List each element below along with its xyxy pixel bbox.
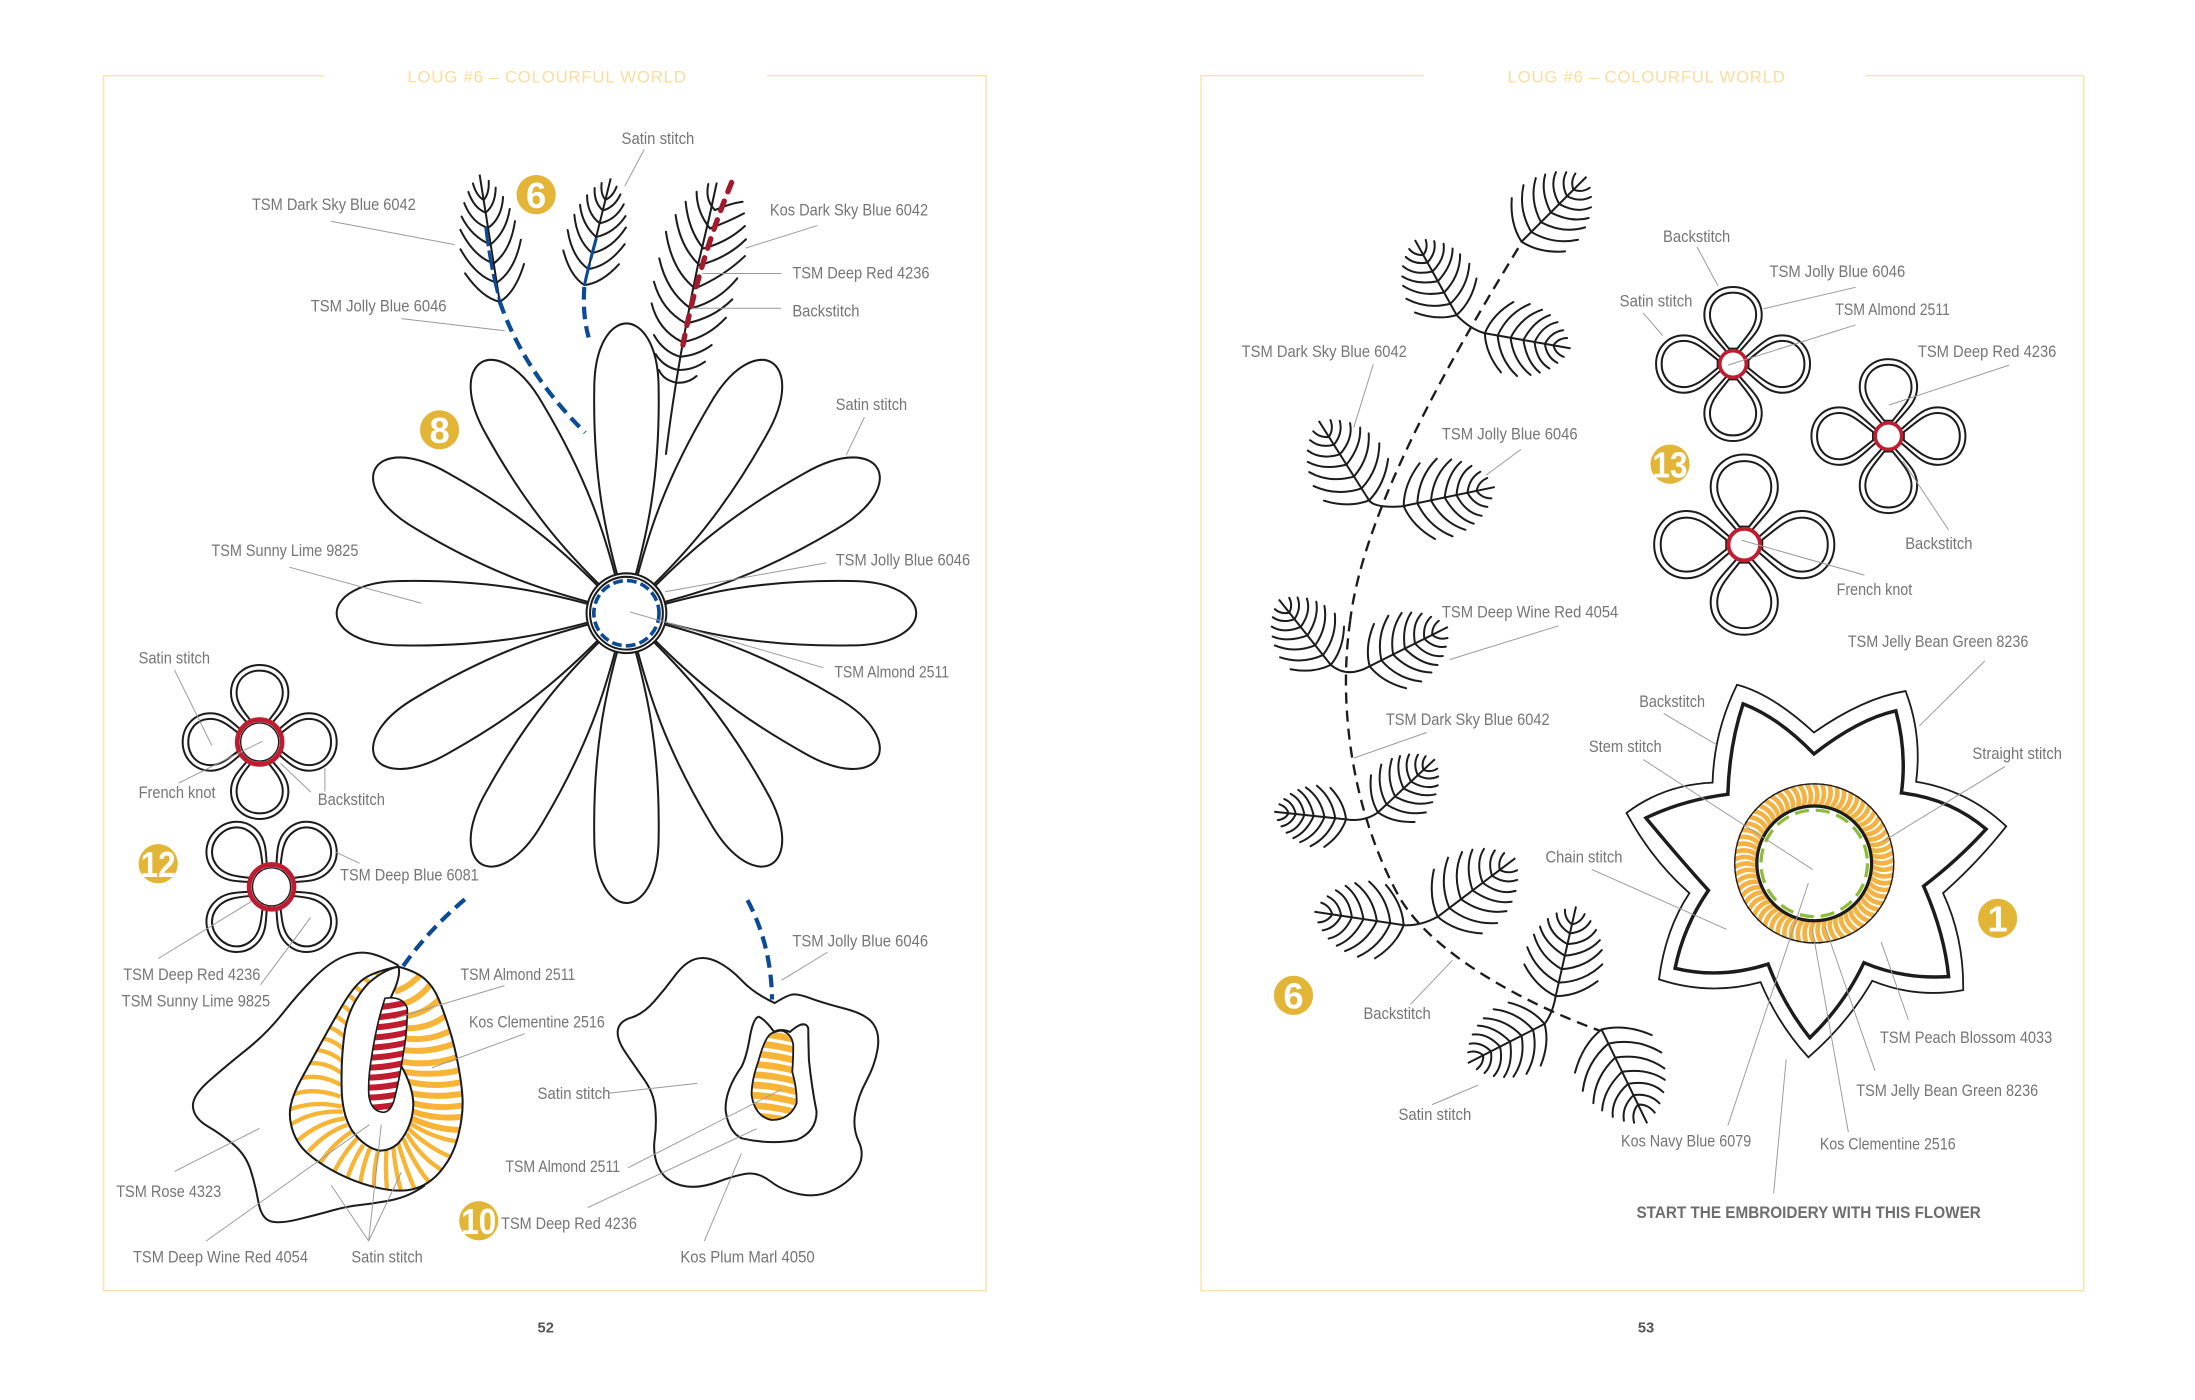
badge 12: 12 [141, 844, 176, 885]
blue stem left [500, 302, 585, 433]
left flower outer petal [193, 953, 425, 1222]
left flower red tube [367, 998, 410, 1112]
label: Backstitch [318, 791, 385, 809]
leaf pair F [1451, 898, 1614, 1095]
blue stem on right flower [748, 900, 772, 1000]
badge 6 [517, 175, 556, 216]
flower C [1654, 455, 1834, 635]
panel: left page [104, 68, 986, 1337]
label: TSM Jolly Blue 6046 [836, 552, 970, 570]
right flower inner tulip and gold stripes [726, 1017, 817, 1142]
callout: start flower: START THE EMBROIDERY WITH THIS FLOWER [1636, 1204, 1981, 1222]
blue stitch on left leaf [486, 227, 500, 301]
leaf pair A [1383, 223, 1577, 384]
label: TSM Dark Sky Blue 6042 [1386, 711, 1550, 729]
label: TSM Peach Blossom 4033 [1880, 1029, 2052, 1047]
leaf middle [556, 171, 639, 292]
flower left lower [159, 775, 384, 999]
label: TSM Deep Red 4236 [123, 966, 260, 984]
label: TSM Jolly Blue 6046 [1769, 263, 1905, 281]
label: Backstitch [1663, 228, 1730, 246]
label: TSM Almond 2511 [461, 966, 575, 984]
badge 8: 8 [429, 410, 450, 451]
dashed stem upper [1350, 248, 1518, 620]
label: Chain stitch [1545, 848, 1622, 866]
branch lower [1252, 578, 2006, 1143]
page frame right [1201, 76, 2084, 1291]
label: TSM Dark Sky Blue 6042 [1242, 343, 1407, 361]
label: Kos Clementine 2516 [469, 1014, 605, 1032]
leaf pair E [1309, 825, 1540, 963]
label: TSM Almond 2511 [834, 664, 949, 682]
label: Satin stitch [538, 1085, 610, 1103]
dashed stem lower [1346, 620, 1600, 1031]
daisy flower [337, 323, 916, 903]
label: Backstitch [1363, 1005, 1431, 1023]
blue stem on left flower [403, 896, 469, 966]
label: TSM Almond 2511 [1835, 301, 1950, 319]
label: Kos Navy Blue 6079 [1621, 1133, 1751, 1151]
page frame left [104, 76, 986, 1291]
left flower gold band [288, 967, 465, 1193]
blue stitch on middle leaf [584, 238, 596, 286]
badge 8 [420, 410, 459, 451]
badge 13: 13 [1653, 444, 1688, 485]
long-stem leaf [652, 178, 746, 454]
star inner [1646, 704, 1986, 1038]
label: Backstitch [1639, 693, 1705, 711]
red stitch on long leaf [683, 178, 733, 345]
branch upper [1286, 248, 1518, 620]
heading left: LOUG #6 – COLOURFUL WORLD [407, 68, 686, 87]
flower B [1811, 359, 1965, 513]
left flower inner white [342, 967, 413, 1151]
page number 53: 53 [1638, 1321, 1654, 1337]
heading right: LOUG #6 – COLOURFUL WORLD [1508, 68, 1785, 87]
label: TSM Deep Red 4236 [1918, 343, 2056, 361]
badge 10: 10 [461, 1201, 496, 1242]
label: Straight stitch [1972, 745, 2062, 763]
leader lines upper left page [289, 149, 864, 603]
flower A [1656, 287, 1810, 441]
badge 1 [1978, 899, 2017, 940]
label: TSM Sunny Lime 9825 [211, 542, 358, 560]
label: Satin stitch [1398, 1106, 1471, 1124]
label: Backstitch [792, 302, 860, 320]
label: Satin stitch [351, 1249, 423, 1267]
flower left upper [183, 665, 337, 819]
label: TSM Rose 4323 [116, 1183, 221, 1201]
label: TSM Deep Red 4236 [501, 1215, 637, 1233]
label: Backstitch [1905, 535, 1972, 553]
leaf pair D [1271, 735, 1457, 850]
label: French knot [139, 784, 216, 802]
leader lines lower left page [158, 612, 827, 1241]
leaf end [1562, 1010, 1686, 1143]
badge 6: 6 [1283, 976, 1304, 1017]
label: TSM Deep Wine Red 4054 [133, 1249, 308, 1267]
label: TSM Sunny Lime 9825 [122, 993, 270, 1011]
blue stem middle [584, 287, 589, 337]
label: TSM Jolly Blue 6046 [1442, 426, 1578, 444]
leader lines upper right page [1354, 247, 2009, 660]
star outer [1627, 685, 2006, 1057]
label: TSM Deep Red 4236 [792, 265, 930, 283]
label: Kos Clementine 2516 [1820, 1135, 1956, 1153]
label: Satin stitch [139, 650, 210, 668]
label: TSM Jolly Blue 6046 [311, 298, 447, 316]
label: TSM Deep Blue 6081 [340, 867, 479, 885]
leaf pair B [1286, 400, 1503, 545]
label: TSM Jelly Bean Green 8236 [1848, 633, 2028, 651]
label: TSM Jelly Bean Green 8236 [1856, 1082, 2038, 1100]
label: TSM Jolly Blue 6046 [792, 932, 928, 950]
label: Kos Dark Sky Blue 6042 [770, 202, 928, 220]
right flower outer petal [618, 958, 878, 1195]
label: TSM Dark Sky Blue 6042 [252, 196, 416, 214]
badge 1: 1 [1988, 899, 2008, 940]
star flower centre ring [1728, 775, 1903, 951]
badge 6 [1274, 976, 1313, 1017]
label: Satin stitch [836, 396, 907, 414]
leaf top [1494, 149, 1614, 269]
badge 6: 6 [526, 175, 546, 216]
leader lines lower right page [1354, 661, 2005, 1193]
label: Stem stitch [1589, 738, 1662, 756]
label: Satin stitch [1620, 293, 1692, 311]
label: Satin stitch [622, 130, 694, 148]
leaf pair C [1252, 578, 1464, 699]
label: French knot [1837, 581, 1913, 599]
label: Kos Plum Marl 4050 [680, 1249, 815, 1267]
label: TSM Almond 2511 [505, 1158, 620, 1176]
label: TSM Deep Wine Red 4054 [1442, 603, 1618, 621]
star flower [1627, 685, 2006, 1057]
page number 52: 52 [538, 1321, 554, 1337]
leaf left [449, 170, 530, 307]
panel: right page [1201, 68, 2084, 1337]
